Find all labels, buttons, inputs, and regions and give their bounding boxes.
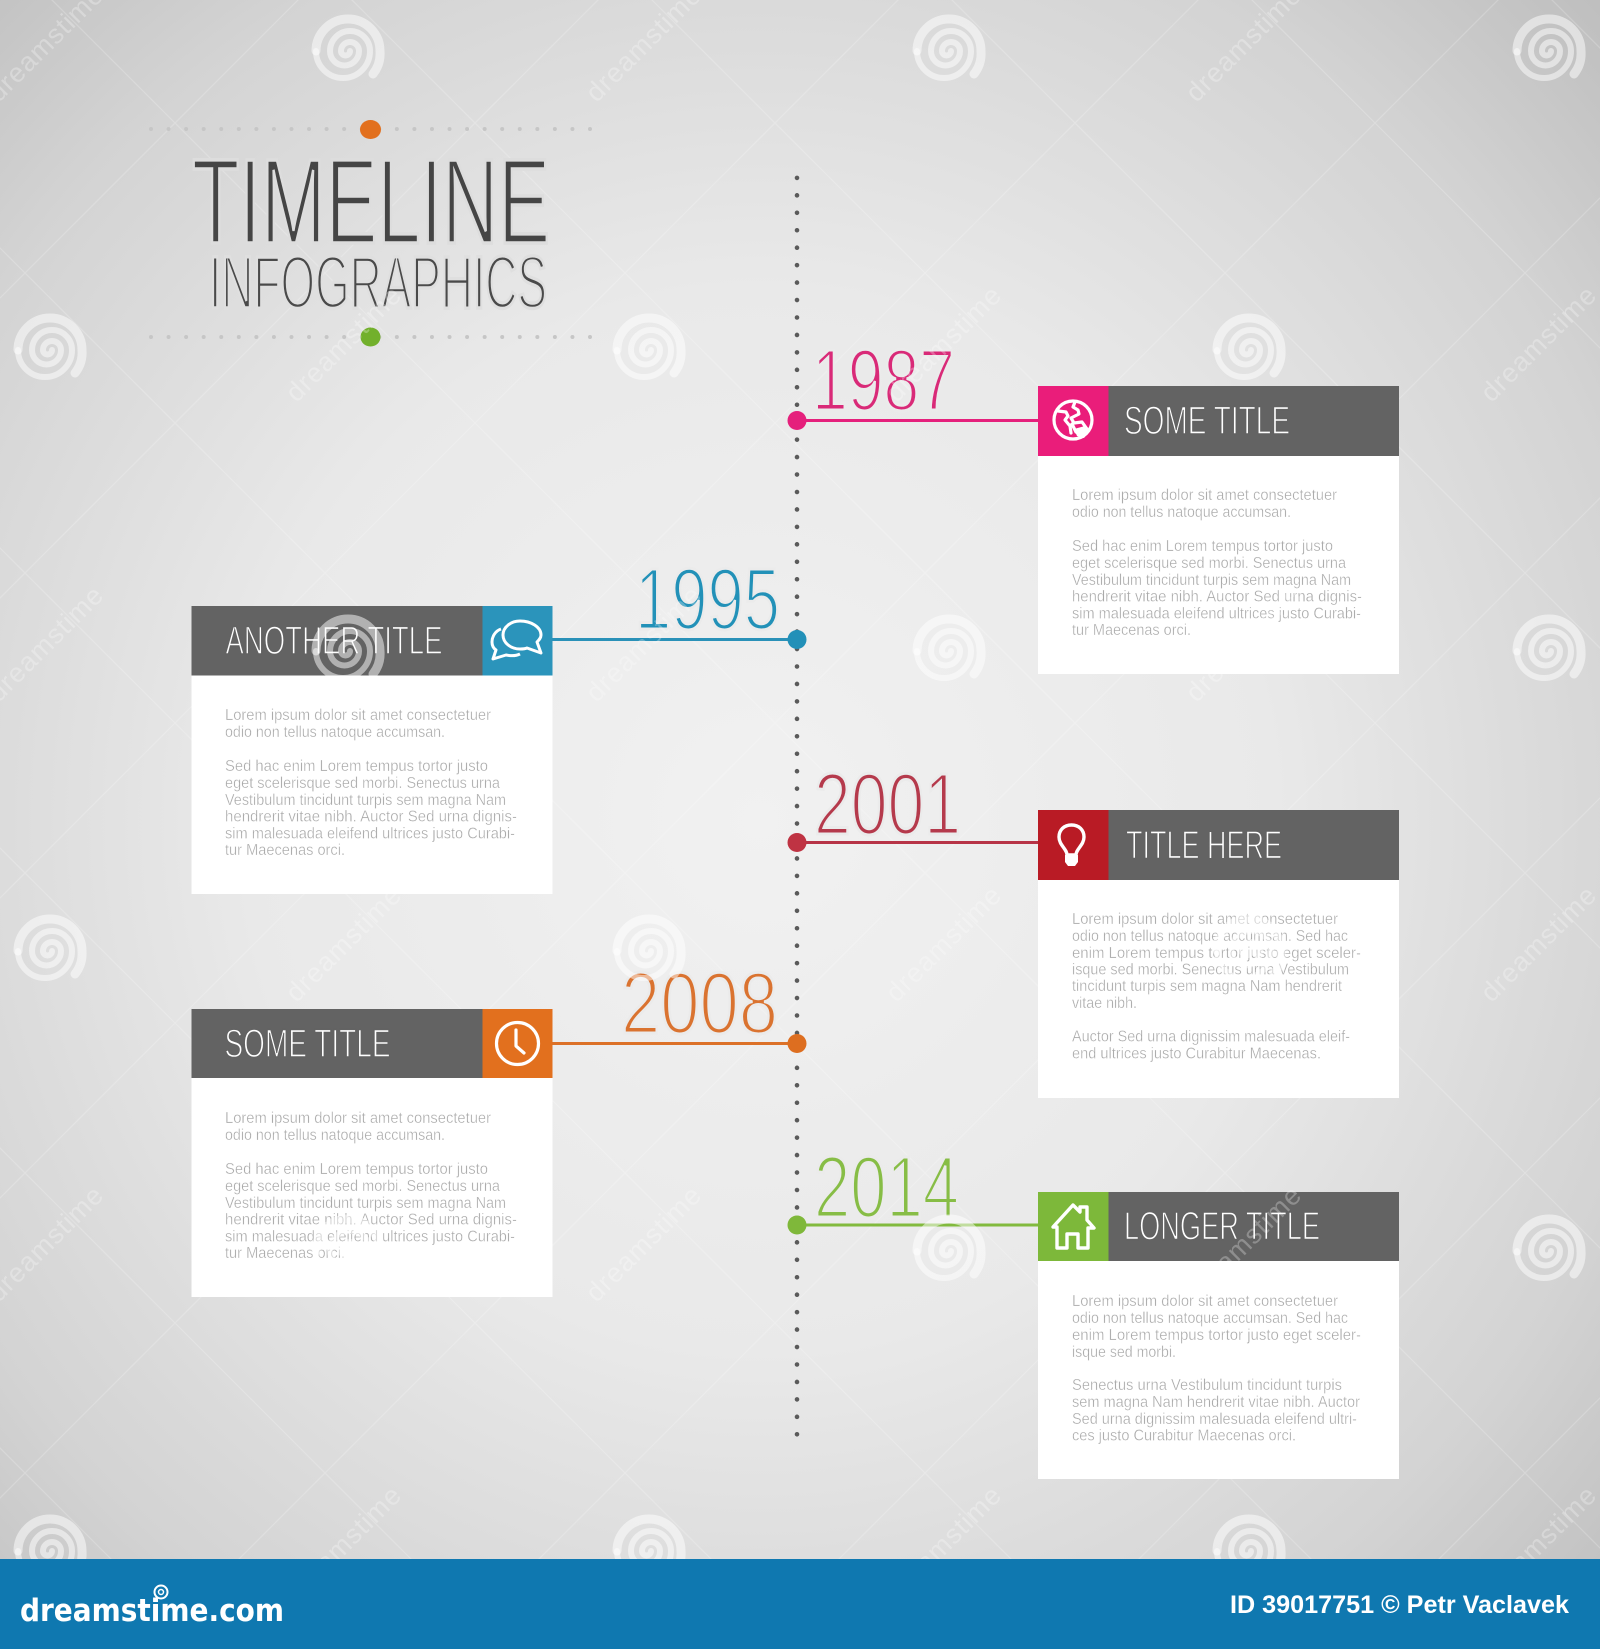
card text [1072, 487, 1362, 639]
accent dot: green [360, 328, 380, 346]
watermark overlay: dreamstime [1475, 880, 1600, 1008]
connector 1995 [551, 630, 806, 649]
card text: hendrerit vitae nibh. Auctor Sed urna dignis- [1072, 588, 1362, 606]
subtitle: INFOGRAPHICS [209, 241, 547, 324]
watermark overlay: dreamstime [580, 580, 708, 708]
icon: light bulb [1059, 825, 1084, 866]
card text: Lorem ipsum dolor sit amet consectetuer [1072, 487, 1338, 504]
card text: odio non tellus natoque accumsan. [1072, 504, 1291, 521]
card text: eget scelerisque sed morbi. Senectus urna [225, 1178, 500, 1195]
card text: eget scelerisque sed morbi. Senectus urna [225, 775, 500, 792]
card text: enim Lorem tempus tortor justo eget sceler- [1072, 945, 1361, 962]
card text: Vestibulum tincidunt turpis sem magna Nam [1072, 572, 1351, 589]
year 1987: 1987 [812, 332, 955, 429]
card text: end ultrices justo Curabitur Maecenas. [1072, 1046, 1321, 1062]
card text: odio non tellus natoque accumsan. [225, 1127, 445, 1144]
card text: tur Maecenas orci. [1072, 622, 1191, 639]
watermark overlay: dreamstime [280, 280, 408, 408]
card text: hendrerit vitae nibh. Auctor Sed urna dignis- [225, 1212, 517, 1228]
card text: sim malesuada eleifend ultrices justo Curabi- [225, 826, 515, 842]
watermark overlay: dreamstime [880, 880, 1008, 1008]
icon: clock [496, 1022, 538, 1064]
event 1995 [192, 551, 806, 894]
card text: odio non tellus natoque accumsan. Sed hac [1072, 928, 1348, 945]
card 1987 [1038, 386, 1399, 674]
card text [225, 707, 517, 859]
card text [1072, 1293, 1361, 1444]
card text: Vestibulum tincidunt turpis sem magna Nam [225, 1195, 506, 1212]
icon: globe [1054, 401, 1092, 439]
card text: ces justo Curabitur Maecenas orci. [1072, 1428, 1296, 1444]
event 2014 [788, 1139, 1399, 1479]
header dotted rule: top [151, 120, 590, 139]
year 2008: 2008 [621, 955, 778, 1052]
icon: chat bubbles [492, 621, 541, 659]
card title: LONGER TITLE [1124, 1204, 1320, 1248]
card text: odio non tellus natoque accumsan. [225, 724, 445, 741]
card text: Vestibulum tincidunt turpis sem magna Nam [225, 792, 506, 809]
watermark overlay: dreamstime [880, 1480, 1008, 1608]
connector 1987 [788, 411, 1039, 430]
watermark overlay: dreamstime [880, 280, 1008, 408]
connector 2008 [551, 1034, 806, 1053]
watermark overlay: dreamstime [280, 880, 408, 1008]
card text: tur Maecenas orci. [225, 1245, 345, 1262]
card text: Lorem ipsum dolor sit amet consectetuer [225, 1110, 492, 1127]
card text: Sed urna dignissim malesuada eleifend ultri- [1072, 1411, 1357, 1428]
year 1995: 1995 [635, 551, 780, 648]
title [192, 133, 550, 324]
card text: isque sed morbi. [1072, 1344, 1176, 1361]
card text [1072, 911, 1361, 1062]
card text: Lorem ipsum dolor sit amet consectetuer [1072, 1293, 1339, 1310]
card text: Sed hac enim Lorem tempus tortor justo [225, 758, 488, 775]
card text: hendrerit vitae nibh. Auctor Sed urna dignis- [225, 808, 517, 826]
card text: sim malesuada eleifend ultrices justo Curabi- [225, 1228, 515, 1246]
card title: ANOTHER TITLE [226, 619, 442, 663]
card 1995 [192, 606, 552, 894]
watermark overlay: dreamstime [1475, 1480, 1600, 1608]
card text: Senectus urna Vestibulum tincidunt turpis [1072, 1377, 1342, 1394]
card title: TITLE HERE [1126, 824, 1282, 868]
header dotted rule: bottom [151, 328, 590, 346]
footer logo: dreamstime.com [20, 1593, 284, 1629]
event 2008 [192, 955, 806, 1297]
card text [225, 1110, 517, 1262]
watermark overlay: dreamstime [580, 1180, 708, 1308]
accent dot: orange [360, 120, 381, 139]
watermark overlay: dreamstime [1180, 580, 1308, 708]
event 2001 [788, 756, 1399, 1098]
timeline axis [795, 178, 799, 1437]
card title: SOME TITLE [224, 1022, 390, 1066]
card text: Lorem ipsum dolor sit amet consectetuer [225, 707, 492, 724]
card 2008 [192, 1009, 552, 1297]
card title: SOME TITLE [1124, 399, 1290, 443]
card text: sem magna Nam hendrerit vitae nibh. Auctor [1072, 1394, 1361, 1411]
icon: house [1053, 1205, 1094, 1248]
watermark overlay: dreamstime [1475, 280, 1600, 408]
card text: odio non tellus natoque accumsan. Sed hac [1072, 1310, 1348, 1327]
title: TIMELINE [192, 133, 550, 269]
event 1987 [788, 332, 1399, 674]
card text: Lorem ipsum dolor sit amet consectetuer [1072, 911, 1339, 928]
card text: vitae nibh. [1072, 995, 1137, 1012]
footer band [0, 1559, 1600, 1649]
card text: eget scelerisque sed morbi. Senectus urna [1072, 555, 1346, 572]
year 2014: 2014 [814, 1139, 959, 1236]
connector 2014 [788, 1216, 1039, 1234]
card text: Sed hac enim Lorem tempus tortor justo [225, 1161, 488, 1178]
footer credit: ID 39017751 © Petr Vaclavek [1230, 1591, 1569, 1619]
card text: tur Maecenas orci. [225, 842, 345, 859]
card 2014 [1038, 1192, 1399, 1479]
year 2001: 2001 [814, 756, 961, 853]
card text: enim Lorem tempus tortor justo eget sceler- [1072, 1327, 1361, 1344]
card text: sim malesuada eleifend ultrices justo Curabi- [1072, 606, 1361, 622]
connector 2001 [788, 833, 1039, 852]
card text: Sed hac enim Lorem tempus tortor justo [1072, 538, 1333, 555]
watermark overlay: dreamstime [1180, 1180, 1308, 1308]
card text: tincidunt turpis sem magna Nam hendrerit [1072, 978, 1342, 995]
card 2001 [1038, 810, 1399, 1098]
watermark overlay: dreamstime [280, 1480, 408, 1608]
card text: Auctor Sed urna dignissim malesuada eleif- [1072, 1028, 1350, 1046]
card text: isque sed morbi. Senectus urna Vestibulum [1072, 962, 1349, 978]
